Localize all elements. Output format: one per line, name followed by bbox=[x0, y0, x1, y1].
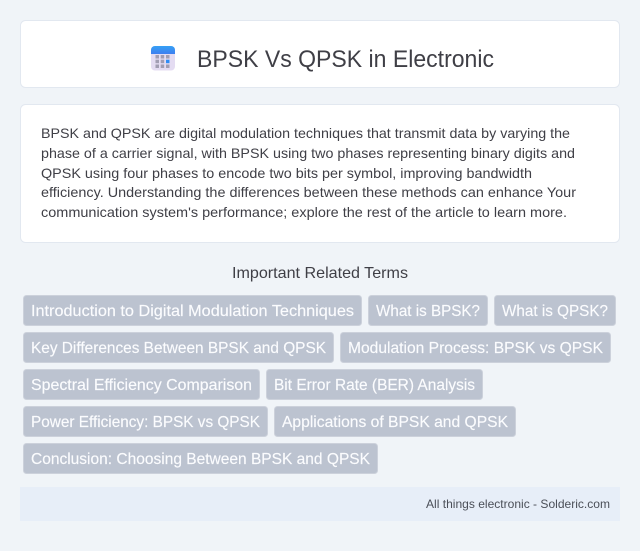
tag: modulation process: Modulation Process: BPSK vs QPSK bbox=[348, 340, 603, 357]
intro text: communication system's performance; explore the rest of the article to learn more. bbox=[41, 204, 567, 220]
intro text: efficiency. Understanding the differences between these methods can enhance Your bbox=[41, 184, 576, 200]
footer bbox=[20, 487, 620, 521]
tag: power efficiency bbox=[24, 406, 268, 436]
tag: introduction bbox=[24, 296, 362, 326]
title: BPSK Vs QPSK in Electronic bbox=[197, 46, 494, 73]
related terms tags bbox=[24, 296, 616, 474]
tag: what is QPSK bbox=[494, 296, 616, 326]
tag: applications: Applications of BPSK and QPSK bbox=[282, 414, 508, 431]
footer text: All things electronic - Solderic.com bbox=[426, 497, 610, 511]
intro panel bbox=[20, 104, 620, 242]
intro text: BPSK and QPSK are digital modulation techniques that transmit data by varying the bbox=[41, 125, 570, 141]
icon: calendar bbox=[151, 46, 175, 70]
intro text bbox=[41, 125, 576, 220]
tag: what is BPSK: What is BPSK? bbox=[376, 303, 480, 320]
tag: conclusion bbox=[24, 444, 378, 474]
tag: power efficiency: Power Efficiency: BPSK vs QPSK bbox=[31, 414, 260, 431]
tag: conclusion: Conclusion: Choosing Between BPSK and QPSK bbox=[31, 451, 370, 468]
tag: key differences: Key Differences Between BPSK and QPSK bbox=[31, 340, 326, 357]
tag: applications bbox=[274, 406, 516, 436]
tag: spectral efficiency bbox=[24, 370, 260, 400]
tag: what is BPSK bbox=[368, 296, 488, 326]
tag: introduction: Introduction to Digital Modulation Techniques bbox=[31, 303, 354, 320]
intro text: phase of a carrier signal, with BPSK using two phases representing binary digits and bbox=[41, 145, 575, 161]
tag: spectral efficiency: Spectral Efficiency Comparison bbox=[31, 377, 252, 394]
tag: bit error rate: Bit Error Rate (BER) Analysis bbox=[274, 377, 475, 394]
tag: key differences bbox=[24, 332, 334, 362]
header panel bbox=[20, 20, 620, 88]
tag: bit error rate bbox=[266, 370, 482, 400]
tag: modulation process bbox=[340, 332, 610, 362]
heading: important related terms: Important Related Terms bbox=[232, 265, 408, 282]
tag: what is QPSK: What is QPSK? bbox=[502, 303, 608, 320]
intro text: QPSK using four phases to encode two bits per symbol, improving bandwidth bbox=[41, 165, 532, 181]
